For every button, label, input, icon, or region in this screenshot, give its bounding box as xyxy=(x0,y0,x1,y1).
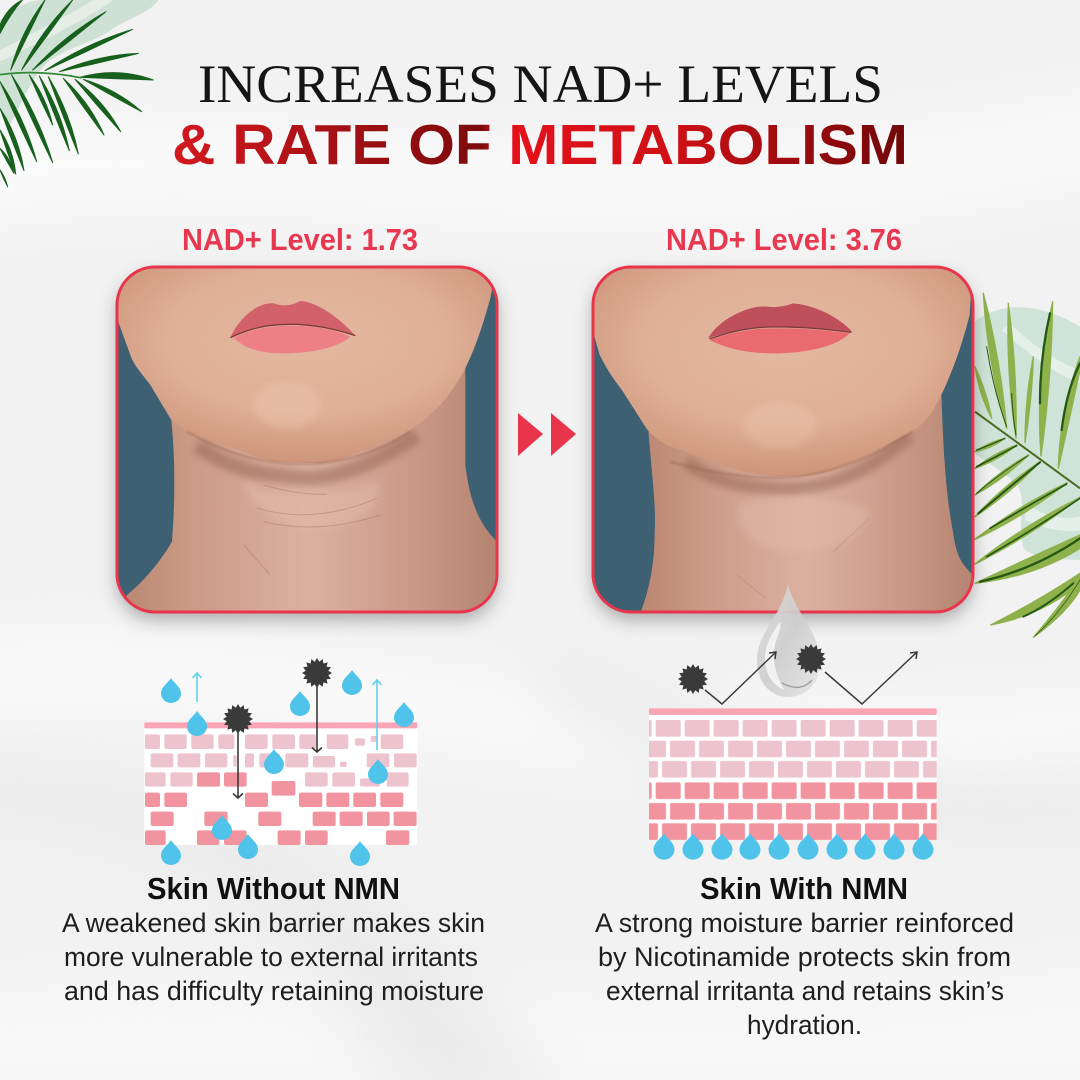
description xyxy=(595,908,1014,1040)
water drops row xyxy=(654,833,934,860)
strong skin barrier xyxy=(649,708,937,840)
title line 2: & RATE OF METABOLISM xyxy=(172,113,908,177)
irritants xyxy=(678,644,826,694)
irritant arrows xyxy=(233,685,322,798)
lips xyxy=(708,303,852,353)
decorative palm frond: right xyxy=(975,293,1080,637)
label: after NAD+ level: NAD+ Level: 3.76 xyxy=(666,222,902,257)
water droplet xyxy=(757,583,820,697)
text block: skin without NMN xyxy=(62,871,485,1006)
panel: photo before xyxy=(117,265,497,615)
description: and has difficulty retaining moisture xyxy=(64,976,484,1006)
deflected irritant arrows xyxy=(705,652,917,704)
moisture escaping arrows xyxy=(192,673,382,750)
title xyxy=(172,54,908,177)
decorative palm leaf: top left xyxy=(0,0,158,187)
lips xyxy=(230,301,355,353)
panel: photo after xyxy=(593,265,973,615)
text block: skin with NMN xyxy=(595,871,1014,1040)
arrows: before to after xyxy=(518,413,576,456)
description: external irritanta and retains skin’s xyxy=(606,976,1004,1006)
description: more vulnerable to external irritants xyxy=(64,942,478,972)
description: A strong moisture barrier reinforced xyxy=(595,908,1014,938)
water drops xyxy=(161,670,414,866)
description xyxy=(62,908,485,1006)
description: hydration. xyxy=(747,1010,862,1040)
label: before NAD+ level: NAD+ Level: 1.73 xyxy=(182,222,418,257)
irritants xyxy=(223,658,332,734)
diagram: skin without NMN xyxy=(144,658,417,866)
diagram: skin with NMN xyxy=(649,583,937,860)
heading: Skin With NMN xyxy=(700,871,908,906)
description: A weakened skin barrier makes skin xyxy=(62,908,485,938)
title line 1: INCREASES NAD+ LEVELS xyxy=(198,54,883,114)
description: by Nicotinamide protects skin from xyxy=(598,942,1011,972)
heading: Skin Without NMN xyxy=(147,871,400,906)
damaged skin barrier xyxy=(144,722,417,845)
